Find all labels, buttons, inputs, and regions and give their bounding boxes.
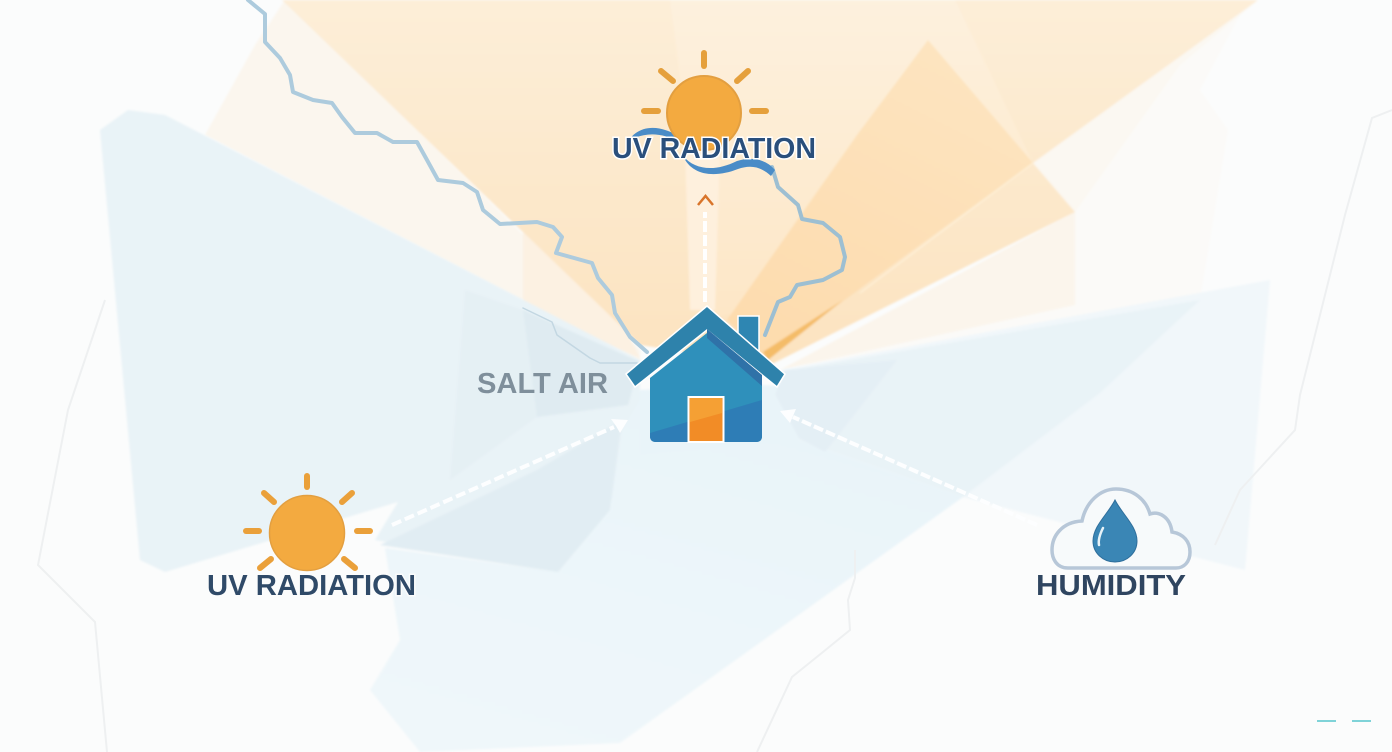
arrow: humidity to house [780, 409, 1037, 525]
corner dashes [1317, 720, 1371, 722]
heading: humidity: HUMIDITY [1036, 570, 1186, 602]
heading: UV radiation, left: UV RADIATION [207, 570, 416, 602]
icon: sun, top [644, 53, 766, 150]
river line [248, 0, 845, 363]
arrow: up from house [698, 196, 713, 302]
background: orange rays [205, 0, 1258, 370]
label: salt air: SALT AIR [477, 368, 608, 400]
heading: UV radiation, top: UV RADIATION [612, 133, 816, 165]
arrow: left UV to house [392, 419, 628, 525]
icon: house [626, 306, 785, 442]
icon: sun, left [246, 476, 370, 570]
icon: cloud with water drop [1052, 489, 1190, 568]
background: blue shards [100, 110, 1270, 752]
